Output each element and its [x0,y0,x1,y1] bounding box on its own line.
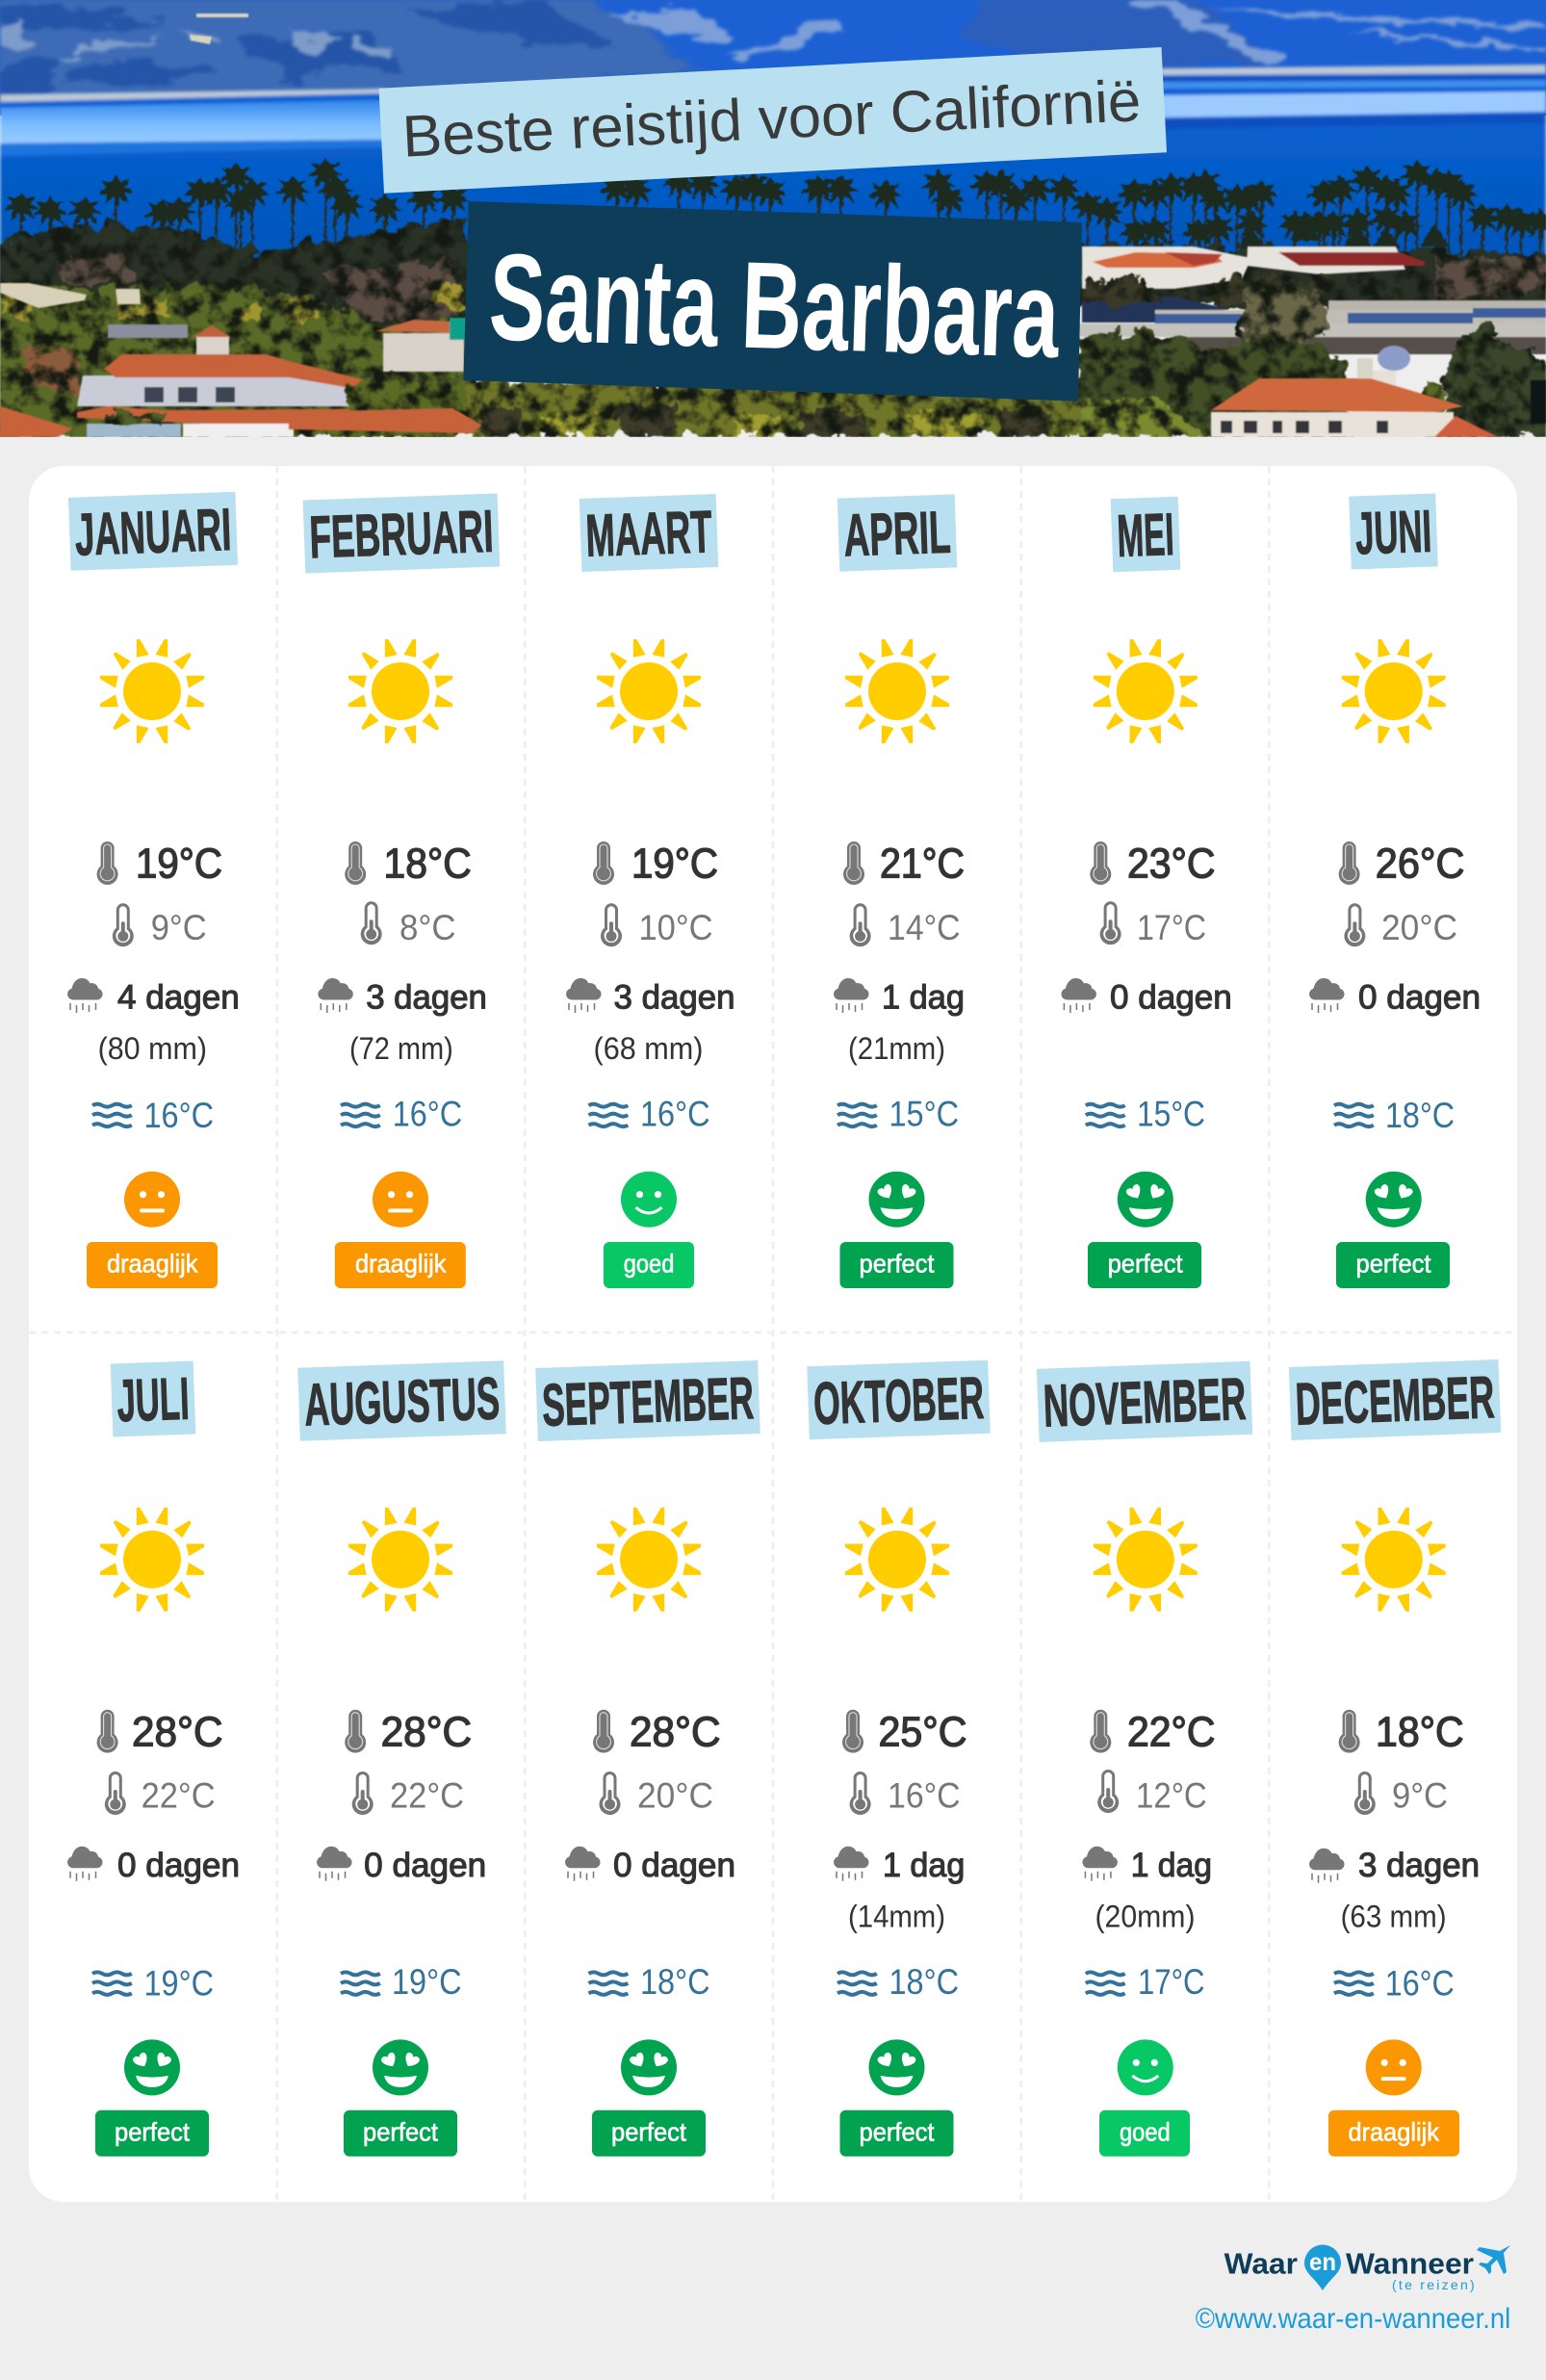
rating badge: goed [1120,2117,1171,2146]
heading: Juli [111,1361,195,1436]
rating badge [95,2110,209,2157]
heading: September: SEPTEMBER [541,1365,755,1439]
rating badge: draaglijk [107,1250,198,1279]
month: Januari [67,492,240,1288]
rating badge: perfect [611,2117,687,2146]
month: November [1037,1361,1252,2157]
rain days: 1 dag [882,978,965,1016]
rain days: 0 dagen [1110,978,1232,1016]
maximum temperature: 28°C [381,1709,472,1755]
rainfall amount: (14mm) [848,1900,945,1934]
rating badge [592,2110,706,2157]
logo: Waar en Wanneer: Wanneer [1346,2247,1474,2281]
sea temperature: 15°C [889,1094,959,1133]
minimum temperature: 9°C [1392,1776,1448,1816]
rating badge [1088,1242,1201,1288]
rating face [1118,1172,1173,1228]
maximum temperature [1090,841,1215,888]
maximum temperature: 21°C [880,841,965,888]
rating face [124,2039,180,2095]
minimum temperature: 17°C [1137,908,1206,947]
sea temperature: 18°C [640,1962,710,2002]
rain days [1082,1847,1212,1884]
rating badge: perfect [1108,1250,1183,1279]
sea temperature: 17°C [1138,1962,1205,2002]
month: Maart [566,494,735,1288]
month: Mei [1061,497,1232,1288]
rating badge [839,1242,953,1288]
subtitle banner: Beste reistijd voor Californië [400,67,1143,169]
heading: Februari: FEBRUARI [308,499,495,571]
sea temperature: 18°C [1385,1096,1455,1135]
month: April [834,494,965,1288]
rating badge [344,2110,457,2157]
title banner: Santa Barbara: Santa Barbara [487,228,1062,384]
rain days: 0 dagen [117,1847,240,1884]
rating face [621,2039,677,2095]
heading: September [535,1360,760,1441]
month: Juli [67,1361,240,2157]
rating badge: draaglijk [1348,2117,1440,2146]
sea temperature [1334,1096,1455,1135]
logo: Waar en Wanneer [1224,2245,1510,2292]
rating badge [1099,2110,1190,2157]
sea temperature [92,1964,214,2004]
rainfall amount: (21mm) [848,1031,945,1066]
minimum temperature: 9°C [151,908,207,947]
maximum temperature: 28°C [630,1709,720,1755]
icon: map pin [1304,2245,1341,2290]
rain days [834,1847,965,1884]
sea temperature: 16°C [393,1094,462,1133]
icon: sun [597,639,701,743]
sea temperature [92,1096,214,1135]
minimum temperature: 16°C [888,1776,961,1816]
heading: Mei [1111,497,1180,572]
rating badge: perfect [859,1250,935,1279]
heading: Juli: JULI [116,1366,191,1435]
minimum temperature [105,1772,216,1816]
heading: Februari [303,493,500,574]
heading: Januari: JANUARI [74,497,232,569]
maximum temperature: 26°C [1376,841,1464,888]
minimum temperature [1097,1770,1207,1816]
rainfall amount: (68 mm) [593,1031,703,1066]
rain days: 1 dag [1131,1847,1212,1884]
heading: Juni: JUNI [1354,499,1432,567]
maximum temperature [345,841,472,888]
sea temperature [341,1094,462,1133]
month: Augustus [297,1360,506,2157]
icon: map pin: en [1309,2249,1336,2276]
rating face [868,2039,924,2095]
rain days: 3 dagen [614,978,735,1016]
maximum temperature [1339,1709,1464,1755]
heading: Augustus: AUGUSTUS [303,1365,501,1439]
sea temperature [589,1094,710,1133]
heading: Juni [1349,493,1438,570]
icon: sun [1342,639,1446,743]
sea temperature [1086,1094,1205,1133]
maximum temperature: 23°C [1127,841,1215,888]
minimum temperature [1354,1772,1448,1816]
minimum temperature: 14°C [888,908,961,947]
sea temperature: 16°C [144,1096,214,1135]
rating badge: perfect [363,2117,439,2146]
maximum temperature: 18°C [1376,1709,1464,1755]
icon: sun [100,1508,204,1612]
rating face [1118,2039,1173,2095]
icon: sun [597,1508,701,1612]
minimum temperature [599,1772,713,1816]
sea temperature: 19°C [392,1962,462,2002]
rating badge [1336,1242,1450,1288]
heading: November [1037,1361,1252,1442]
icon: sun [1094,639,1198,743]
rain days [834,978,965,1016]
sea temperature [837,1094,959,1133]
rating badge: goed [624,1250,674,1279]
rainfall amount: (80 mm) [98,1031,207,1066]
icon: sun [845,639,949,743]
minimum temperature [361,901,456,947]
rating badge [604,1242,694,1288]
sea temperature: 19°C [144,1964,214,2004]
heading: Januari [68,492,238,571]
minimum temperature [850,1772,961,1816]
rating badge [839,2110,953,2157]
heading: Oktober [807,1360,991,1439]
month: Februari [303,493,500,1288]
rating face [868,1172,924,1228]
minimum temperature: 20°C [637,1776,713,1816]
copyright url: ©www.waar-en-wanneer.nl [1196,2303,1510,2335]
rainfall amount: (20mm) [1095,1900,1196,1934]
maximum temperature: 19°C [631,841,718,888]
month: December [1289,1359,1501,2157]
heading: Mei: MEI [1116,502,1175,570]
rain days: 3 dagen [366,978,487,1016]
rating badge [1328,2110,1459,2157]
icon: sun [1342,1508,1446,1612]
icon: airplane [1477,2245,1510,2274]
minimum temperature [113,903,207,947]
rain days: 1 dag [883,1847,965,1884]
subtitle banner [379,47,1167,194]
minimum temperature: 10°C [639,908,712,947]
minimum temperature [601,903,712,947]
minimum temperature: 8°C [399,908,456,947]
logo: Waar en Wanneer: (te reizen) [1392,2277,1475,2292]
sea temperature: 15°C [1137,1094,1205,1133]
rating badge: perfect [859,2117,935,2146]
heading: April [837,494,957,572]
heading: November: NOVEMBER [1043,1366,1248,1440]
heading: April: APRIL [842,500,952,569]
maximum temperature: 18°C [383,841,472,888]
sea temperature: 16°C [1385,1964,1455,2004]
rain days: 3 dagen [1358,1847,1480,1884]
maximum temperature [843,841,965,888]
maximum temperature [97,841,222,888]
month: Juni [1309,493,1481,1288]
rating badge [335,1242,466,1288]
rating face [1366,2039,1422,2095]
maximum temperature [1339,841,1464,888]
logo: Waar en Wanneer: Waar [1224,2247,1298,2281]
minimum temperature: 22°C [142,1776,216,1816]
rating badge [87,1242,218,1288]
title banner: Santa Barbara [463,201,1082,401]
sea temperature [589,1962,710,2002]
heading: Maart [580,494,718,572]
rain days: 0 dagen [613,1847,735,1884]
rating badge: draaglijk [355,1250,447,1279]
heading: Augustus [297,1360,506,1441]
maximum temperature: 19°C [136,841,222,888]
rain days: 0 dagen [1358,978,1481,1016]
panel: climate table [29,466,1517,2202]
rating face [373,2039,428,2095]
rating face [373,1172,428,1228]
month: September [535,1360,760,2157]
maximum temperature [593,1709,720,1755]
maximum temperature: 25°C [878,1709,966,1755]
maximum temperature [842,1709,966,1755]
rain days: 0 dagen [364,1847,486,1884]
rating face [124,1172,180,1228]
heading: Maart: MAART [584,499,713,570]
icon: sun [845,1508,949,1612]
sea temperature [1334,1964,1455,2004]
sea temperature: 16°C [640,1094,710,1133]
minimum temperature [1100,901,1206,947]
sea temperature: 18°C [889,1962,959,2002]
palm trees [4,158,1546,308]
icon: sun [348,1508,452,1612]
maximum temperature [593,841,718,888]
minimum temperature: 20°C [1381,908,1457,947]
bottom buildings [289,346,1546,437]
minimum temperature: 22°C [390,1776,464,1816]
rainfall amount: (63 mm) [1341,1900,1447,1934]
month: Oktober [807,1360,991,2157]
heading: Oktober: OKTOBER [812,1365,985,1437]
rating badge: perfect [115,2117,191,2146]
header photo: Santa Barbara coastline [0,0,1546,437]
foreground foliage [106,279,1546,437]
rain days: 4 dagen [117,978,240,1016]
icon: sun [1094,1508,1198,1612]
rating face [621,1172,677,1228]
minimum temperature [850,903,961,947]
rainfall amount: (72 mm) [349,1031,453,1066]
icon: sun [348,639,452,743]
maximum temperature [1090,1709,1215,1755]
rating face [1366,1172,1422,1228]
foliage behind buildings [0,218,1546,437]
sea temperature [1086,1962,1205,2002]
maximum temperature: 22°C [1127,1709,1215,1755]
rating badge: perfect [1355,1250,1431,1279]
minimum temperature [352,1772,464,1816]
maximum temperature: 28°C [132,1709,223,1755]
minimum temperature [1344,903,1457,947]
sea temperature [837,1962,959,2002]
icon: sun [100,639,204,743]
minimum temperature: 12°C [1136,1776,1207,1816]
sea temperature [341,1962,462,2002]
buildings [0,246,1546,437]
